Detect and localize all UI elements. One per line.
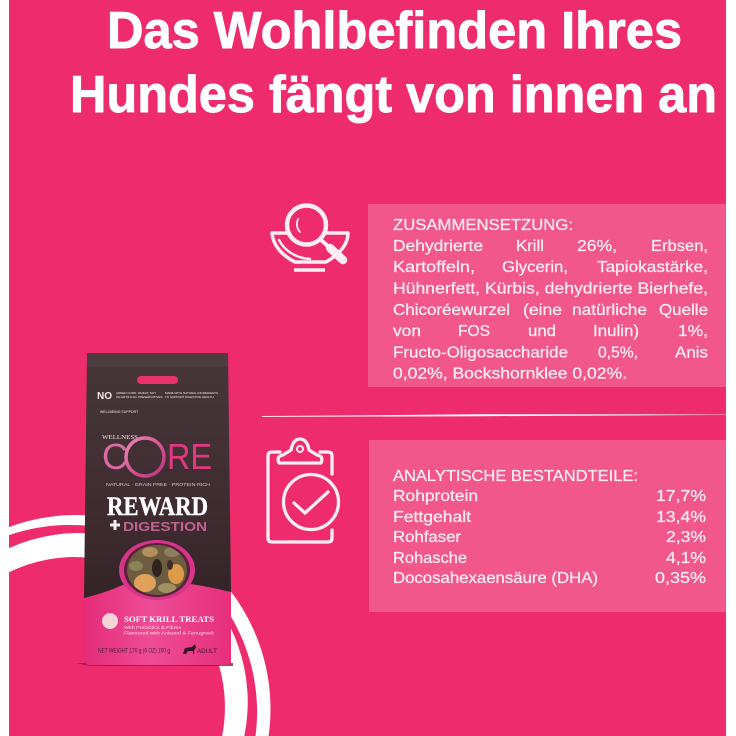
analysis table (393, 468, 706, 587)
icon: clipboard with check (268, 439, 338, 542)
ingredients line 3: Hühnerfett, Kürbis, dehydrierte Bierhefe, (393, 280, 708, 298)
treats (127, 545, 187, 595)
ingredients line 6: Anis (675, 344, 708, 362)
ingredients line 5: von (393, 323, 421, 340)
clipboard clip (278, 439, 322, 463)
ingredients line 4 (393, 302, 708, 319)
ingredients line 6 (393, 344, 708, 362)
no-additives badge: ADDED CORN, WHEAT, SOY (116, 391, 156, 395)
no-additives badge: OR ARTIFICIAL PRESERVATIVES (116, 395, 163, 399)
row: Rohasche: 4,1% (666, 550, 706, 567)
clip hole (297, 446, 303, 452)
ingredients line 1: 26%, (577, 238, 617, 255)
bowl inner line (279, 240, 310, 259)
bag body (84, 353, 231, 665)
decorative white rings (9, 515, 270, 736)
treats description (124, 625, 215, 636)
row: Fettgehalt (393, 509, 706, 526)
treats description: Flavoured with Aniseed & Fenugreek (124, 630, 215, 636)
row: Rohprotein: Rohprotein (393, 488, 478, 505)
ingredients line 4: Chicoréewurzel (393, 302, 510, 319)
lens highlight (297, 219, 300, 232)
row: Fettgehalt: 13,4% (656, 509, 706, 526)
variant name: DIGESTION (123, 519, 207, 534)
ingredients line 5 (393, 323, 708, 340)
ingredients line 6: 0,5%, (598, 344, 638, 362)
title line 2: Hundes fängt von innen an (70, 66, 717, 124)
ingredients line 1: Krill (516, 238, 544, 255)
icon: dog (183, 644, 196, 654)
white left strip (0, 0, 9, 736)
hang tab (137, 376, 178, 384)
composition text (393, 217, 708, 382)
net weight: NET WEIGHT 170 g (6 OZ) 100 g (98, 648, 170, 654)
ingredients line 5: 1%, (678, 323, 708, 340)
brand logo CORE (102, 436, 212, 477)
shrimp emblem (102, 613, 118, 629)
treats label: SOFT KRILL TREATS (124, 614, 214, 624)
ingredients line 1: Erbsen, (651, 238, 708, 255)
ingredients line 2: Glycerin, (502, 259, 568, 276)
title line 1: Das Wohlbefinden Ihres (107, 2, 682, 60)
title (70, 2, 717, 124)
handle neck (321, 240, 330, 248)
no-additives badge: TO SUPPORT DIGESTIVE HEALTH (165, 395, 214, 399)
icon: magnifier over bowl (272, 206, 348, 270)
row: DHA (393, 570, 706, 587)
ingredients line 2: Kartoffeln, (393, 259, 475, 276)
ingredients line 2 (393, 259, 708, 276)
plus sign (110, 520, 120, 530)
ingredients line 5: Inulin) (593, 323, 639, 340)
white right strip (726, 0, 736, 736)
analysis heading: ANALYTISCHE BESTANDTEILE: (393, 468, 638, 485)
treats description: With Prebiotics & Fibres (124, 625, 182, 630)
adult label: ADULT (197, 648, 217, 655)
window ring dark (124, 543, 190, 597)
ingredients line 5: und (528, 323, 556, 340)
composition heading: ZUSAMMENSETZUNG: (393, 217, 573, 234)
ingredients line 6: Fructo-Oligosaccharide (393, 344, 568, 362)
bag seal band (87, 353, 228, 367)
bowl base (294, 268, 325, 272)
row: DHA: Docosahexaensäure (DHA) (393, 570, 598, 587)
product name: REWARD (107, 492, 208, 521)
inner ring (9, 533, 248, 736)
no-additives badge: NO (97, 391, 112, 402)
panel: composition (368, 204, 726, 387)
row: Rohprotein: 17,7% (656, 488, 706, 505)
ingredients line 1: Dehydrierte (393, 238, 483, 255)
product bag (76, 353, 233, 666)
no-additives badge (97, 391, 218, 414)
ingredients line 5: FOS (458, 323, 490, 340)
pink lower bag (84, 584, 231, 665)
tagline: NATURAL · GRAIN FREE · PROTEIN-RICH (106, 482, 211, 488)
row: Rohasche (393, 550, 706, 567)
row: Rohprotein (393, 488, 706, 505)
ingredients line 2: Tapiokastärke, (597, 259, 708, 276)
ingredients line 1 (393, 238, 708, 255)
check circle (284, 474, 338, 530)
handle (330, 248, 343, 260)
row: Rohasche: Rohasche (393, 550, 467, 567)
brand logo CORE: C (102, 436, 128, 477)
row: DHA: 0,35% (655, 570, 706, 587)
window ring (119, 540, 195, 600)
lens (287, 206, 326, 244)
clipboard outline (268, 452, 332, 542)
row: Rohfaser: Rohfaser (393, 529, 462, 546)
row: Fettgehalt: Fettgehalt (393, 509, 472, 526)
ingredients line 4: (eine (523, 302, 562, 319)
brand line: WELLNESS (102, 434, 138, 441)
window with treats (119, 540, 195, 600)
no-additives badge: WELLBEING SUPPORT (100, 410, 139, 414)
row: Rohfaser (393, 529, 706, 546)
ingredients line 4: Quelle (659, 302, 708, 319)
panel: analysis (369, 440, 726, 612)
no-additives badge: MADE WITH NATURAL INGREDIENTS (165, 391, 218, 395)
bowl (272, 233, 348, 262)
ingredients line 4: natürliche (572, 302, 647, 319)
ingredients line 7: 0,02%, Bockshornklee 0,02%. (393, 366, 627, 382)
divider line (262, 414, 726, 417)
bag shadow (76, 663, 233, 666)
brand logo CORE: RE (167, 436, 212, 477)
outer ring (9, 515, 270, 736)
check mark (294, 492, 328, 513)
row: Rohfaser: 2,3% (666, 529, 706, 546)
